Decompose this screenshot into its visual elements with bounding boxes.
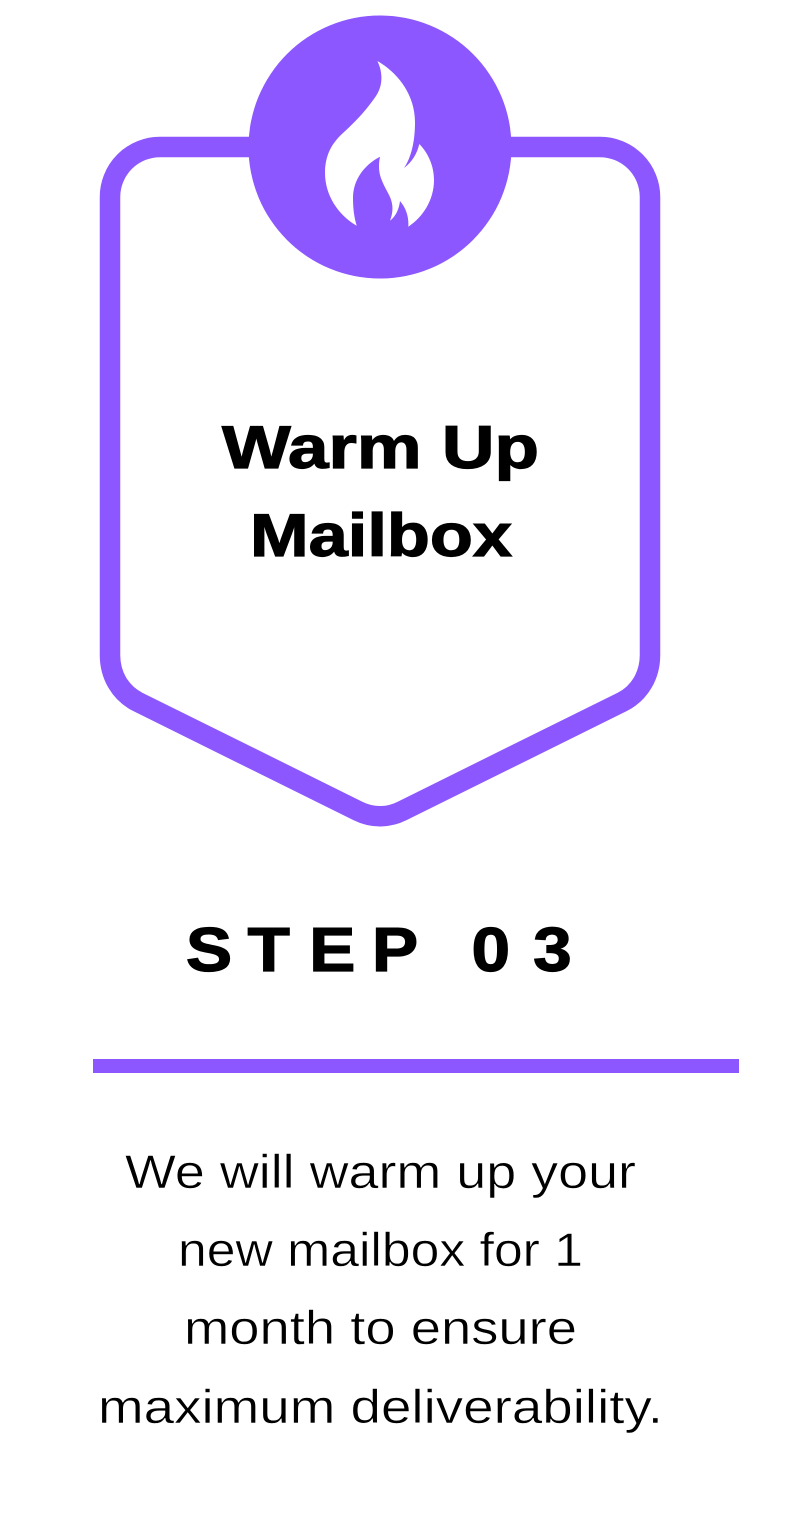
heading: Warm Up Mailbox: Warm Up bbox=[222, 414, 539, 481]
description text: month to ensure bbox=[184, 1301, 577, 1354]
description text: maximum deliverability. bbox=[98, 1380, 663, 1433]
description text bbox=[98, 1145, 663, 1433]
heading: Warm Up Mailbox: Mailbox bbox=[250, 502, 512, 569]
divider bar bbox=[93, 1059, 739, 1073]
description text: new mailbox for 1 bbox=[178, 1223, 583, 1276]
shield outline panel bbox=[110, 147, 650, 816]
description text: We will warm up your bbox=[125, 1145, 636, 1198]
icon: flame in circle bbox=[248, 16, 512, 278]
heading: Warm Up Mailbox bbox=[222, 414, 539, 569]
step label: STEP03 bbox=[186, 914, 572, 984]
